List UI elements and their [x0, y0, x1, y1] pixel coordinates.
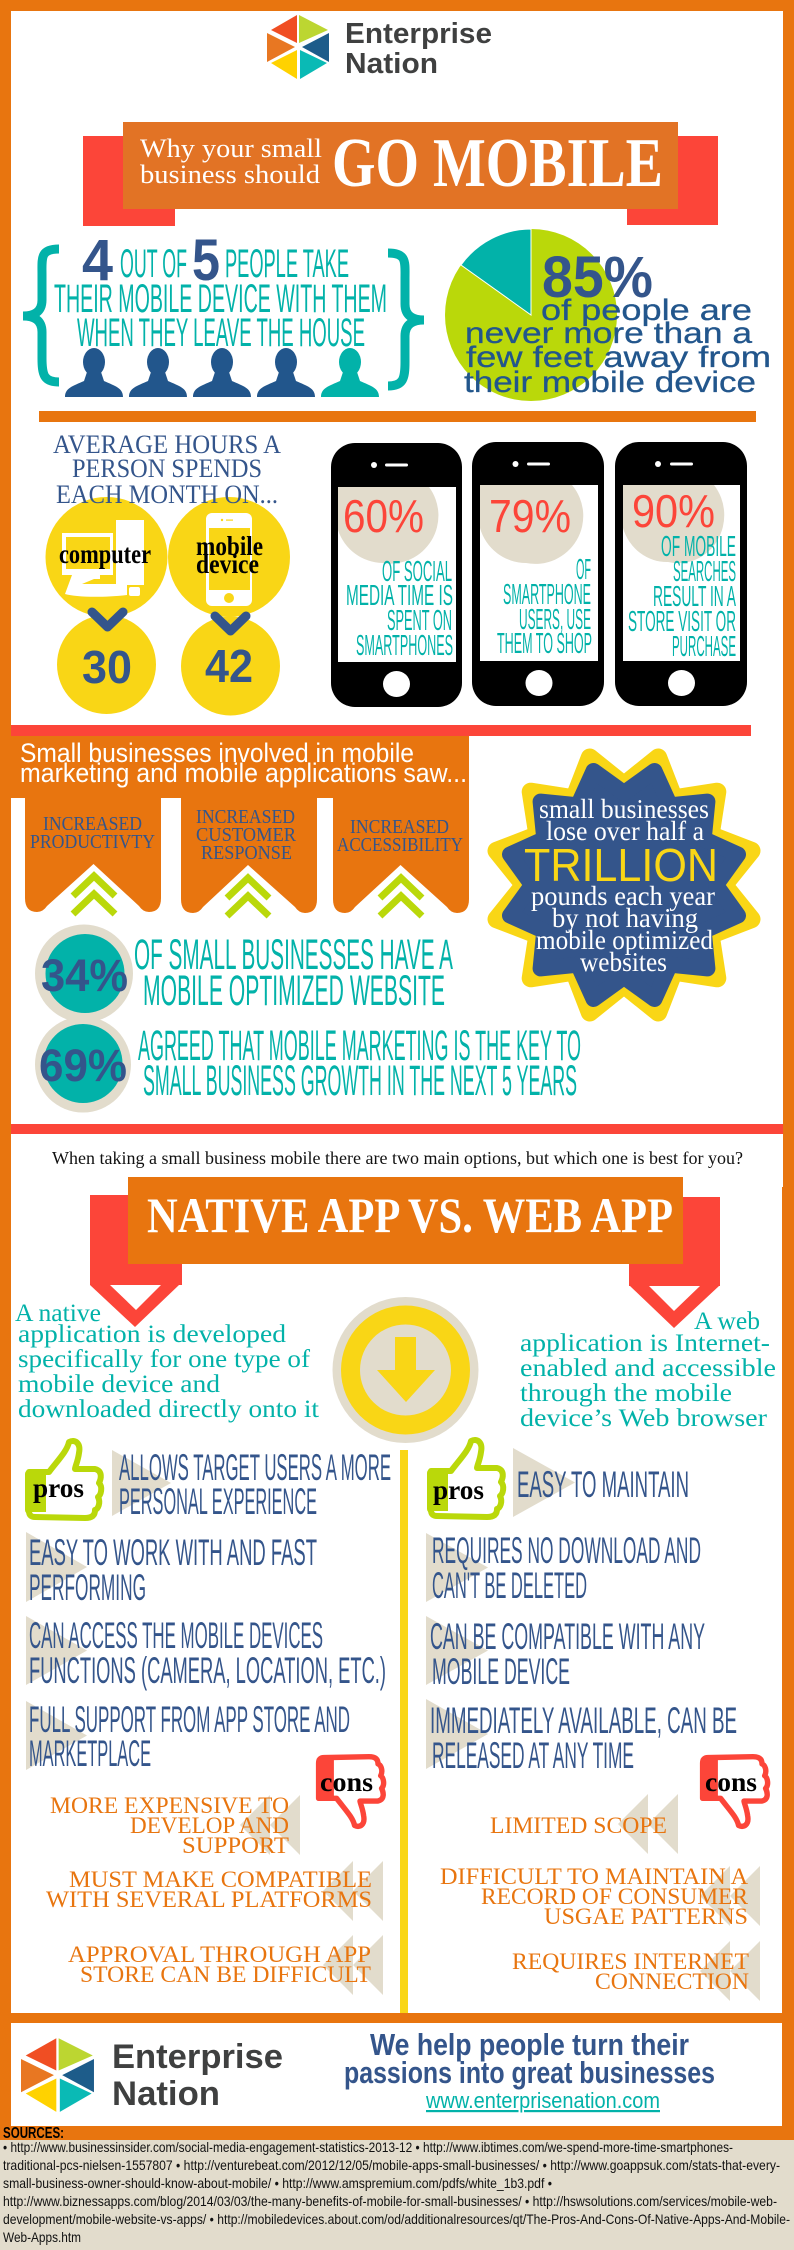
panel: native cons: MORE EXPENSIVE TO [50, 1793, 289, 1818]
phone: 60% social media [331, 443, 462, 707]
pennant: increased productivity: INCREASED [43, 813, 142, 835]
title banner: GO MOBILE [332, 125, 663, 202]
icon: thumbs down native: cons [320, 1767, 373, 1797]
panel: average hours: mobile [196, 531, 263, 561]
panel: average hours: 30 [82, 641, 132, 693]
icon: thumbs up web: pros [433, 1475, 484, 1505]
badge: half a trillion: TRILLION [524, 839, 718, 891]
tagline [344, 2027, 715, 2113]
text: OF SMALL BUSINESSES HAVE A [134, 931, 453, 979]
panel: 85% pie chart: their mobile device [464, 366, 756, 399]
text: SMARTPHONES [356, 630, 453, 662]
stat: 34% optimized website: MOBILE OPTIMIZED WEBSITE [143, 967, 445, 1015]
panel: web pros: CAN'T BE DELETED [432, 1565, 587, 1606]
panel: 85% pie chart: of people are [541, 294, 752, 327]
panel: 4 out of 5 people [23, 228, 424, 397]
footer logo: Enterprise [112, 2038, 283, 2076]
pennant: increased productivity [25, 797, 161, 914]
title banner [83, 122, 718, 226]
phone: 60% social media: MEDIA TIME IS [346, 580, 453, 612]
pennant: increased accessibility: INCREASED [350, 816, 449, 838]
icon: thumbs down web [701, 1757, 768, 1826]
panel: 85% pie chart [445, 229, 771, 401]
panel: 85% pie chart: few feet away from [466, 341, 771, 374]
pennant: increased accessibility: ACCESSIBILITY [337, 834, 463, 856]
badge: half a trillion: by not having [552, 903, 698, 933]
panel: native pros: EASY TO WORK WITH AND FAST [29, 1532, 317, 1573]
text: web app definition: device’s Web browser [520, 1405, 768, 1432]
footer panel [11, 2023, 782, 2126]
panel: native pros: PERFORMING [29, 1567, 146, 1608]
icon: smartphone [206, 513, 252, 606]
stat: 34% optimized website: 34% [41, 950, 128, 1001]
panel: average hours: PERSON SPENDS [72, 454, 262, 483]
pennant: increased accessibility [333, 797, 469, 916]
panel: native cons: WITH SEVERAL PLATFORMS [46, 1887, 372, 1912]
icon: thumbs up web [427, 1440, 503, 1517]
panel: average hours: 42 [205, 640, 253, 692]
panel: 85% pie chart: never more than a [465, 317, 752, 350]
panel: native pros: FUNCTIONS (CAMERA, LOCATION, ETC.) [29, 1650, 386, 1691]
panel: 85% pie chart: 85% [542, 245, 653, 310]
text: native app definition: application is developed [18, 1321, 287, 1348]
phone: 79% shop: 79% [489, 490, 571, 542]
header logo: Enterprise [345, 18, 492, 50]
text: web app definition: application is Internet- [520, 1330, 770, 1357]
pennant: increased customer response: RESPONSE [201, 842, 292, 864]
footer logo: Nation [112, 2075, 220, 2113]
pennant: increased customer response: CUSTOMER [196, 824, 297, 846]
panel: native pros: FULL SUPPORT FROM APP STORE AND [29, 1699, 350, 1740]
panel: native pros: CAN ACCESS THE MOBILE DEVICES [29, 1615, 323, 1656]
panel: average hours [46, 430, 290, 716]
text: ALLOWS TARGET USERS A MORE [119, 1447, 391, 1488]
panel: native pros: MARKETPLACE [29, 1733, 151, 1774]
icon: thumbs up native [25, 1441, 101, 1518]
tagline: passions into great businesses [344, 2055, 715, 2090]
phone: 79% shop [472, 442, 604, 706]
phone: 60% social media: SPENT ON [387, 605, 452, 637]
panel: native cons [46, 1757, 384, 1995]
pennant: increased customer response: INCREASED [196, 806, 295, 828]
panel: native cons: MUST MAKE COMPATIBLE [69, 1867, 372, 1892]
panel: native pros [25, 1441, 391, 1774]
icon: download arrow [332, 1297, 478, 1443]
sources: SOURCES: [3, 2125, 64, 2142]
comparison banner: NATIVE APP VS. WEB APP [147, 1187, 673, 1243]
text: native app definition: downloaded directly onto it [18, 1396, 319, 1423]
panel: average hours: computer [59, 539, 151, 569]
panel: web pros: MOBILE DEVICE [432, 1651, 570, 1692]
panel: average hours: AVERAGE HOURS A [53, 430, 281, 459]
text: native app definition: mobile device and [18, 1371, 221, 1398]
stat: 69% agreed: 69% [39, 1040, 127, 1091]
phone: 60% social media: OF SOCIAL [382, 556, 452, 588]
panel: native pros: PERSONAL EXPERIENCE [119, 1481, 317, 1522]
pennant: increased productivity: PRODUCTIVTY [30, 831, 155, 853]
panel: 4 out of 5 people: PEOPLE TAKE [225, 242, 349, 286]
panel: 4 out of 5 people: 5 [192, 228, 220, 293]
panel: web cons: USGAE PATTERNS [544, 1904, 748, 1929]
badge: half a trillion: mobile optimized [536, 925, 713, 955]
badge: half a trillion: small businesses [539, 794, 709, 824]
badge: half a trillion: pounds each year [531, 881, 715, 911]
sources [0, 2125, 794, 2250]
panel: 4 out of 5 people: 4 [82, 228, 113, 293]
panel: 4 out of 5 people: OUT OF [120, 242, 187, 286]
comparison banner [90, 1177, 720, 1328]
badge: half a trillion [496, 758, 752, 1012]
icon: computer [62, 520, 144, 597]
text: web app definition: enabled and accessible [520, 1355, 776, 1382]
intro sentence: When taking a small business mobile there are two main options, but which one is best for you? [52, 1148, 743, 1168]
title banner: business should [140, 160, 320, 189]
text: native app definition: A native [15, 1300, 101, 1327]
badge: half a trillion: lose over half a [546, 816, 704, 846]
sources: small-business-owner-should-know-about-mobile/ • http://www.amspremium.com/pdfs/white_1b3.pdf • [3, 2175, 552, 2191]
panel: web pros [426, 1440, 737, 1776]
phone: 90% store visit [615, 442, 747, 706]
pennant: increased customer response [181, 797, 317, 916]
panel: web cons: CONNECTION [595, 1969, 749, 1994]
text: native app definition [15, 1300, 319, 1423]
panel: web cons: RECORD OF CONSUMER [481, 1884, 749, 1909]
phone: 79% shop: OF [576, 554, 591, 586]
panel: web cons [440, 1757, 768, 2001]
panel: 4 out of 5 people: THEIR MOBILE DEVICE WITH THEM [54, 277, 387, 321]
icon: thumbs down web: cons [705, 1767, 757, 1797]
phone: 60% social media: 60% [343, 490, 424, 542]
footer logo [21, 2038, 283, 2113]
icon: thumbs up native: pros [33, 1473, 84, 1503]
text: native app definition: specifically for one type of [18, 1346, 311, 1373]
text: web app definition [520, 1308, 776, 1432]
text: web app definition: through the mobile [520, 1380, 732, 1407]
text: THEM TO SHOP [497, 628, 592, 660]
title banner: Why your small [140, 134, 322, 163]
panel: 4 out of 5 people: WHEN THEY LEAVE THE HOUSE [77, 311, 365, 355]
panel: small businesses saw [0, 736, 469, 916]
icon: thumbs down native [317, 1757, 384, 1826]
stat: 34% optimized website [35, 924, 453, 1022]
panel: native cons: STORE CAN BE DIFFICULT [80, 1962, 371, 1987]
panel: web cons: LIMITED SCOPE [490, 1813, 667, 1838]
tagline: We help people turn their [370, 2027, 689, 2062]
panel: average hours: device [196, 549, 259, 579]
panel: small businesses saw: marketing and mobile applications saw... [20, 758, 467, 788]
stat: 69% agreed [35, 1016, 581, 1112]
tagline: www.enterprisenation.com [425, 2088, 660, 2113]
panel: native cons: DEVELOP AND [130, 1813, 289, 1838]
sources: Web-Apps.htm [3, 2229, 81, 2245]
header logo [267, 15, 492, 80]
panel: native cons: SUPPORT [182, 1833, 289, 1858]
panel: small businesses saw: Small businesses involved in mobile [20, 738, 414, 768]
phone: 90% store visit: 90% [632, 485, 715, 537]
badge: half a trillion: websites [580, 947, 667, 977]
panel: average hours: EACH MONTH ON... [56, 480, 278, 509]
text: USERS, USE [519, 604, 591, 636]
panel: web cons: REQUIRES INTERNET [512, 1949, 749, 1974]
panel: native cons: APPROVAL THROUGH APP [68, 1942, 371, 1967]
panel: web cons: DIFFICULT TO MAINTAIN A [440, 1864, 748, 1889]
text: web app definition: A web [694, 1308, 760, 1335]
header logo: Nation [345, 48, 438, 80]
text: SMARTPHONE [503, 579, 591, 611]
